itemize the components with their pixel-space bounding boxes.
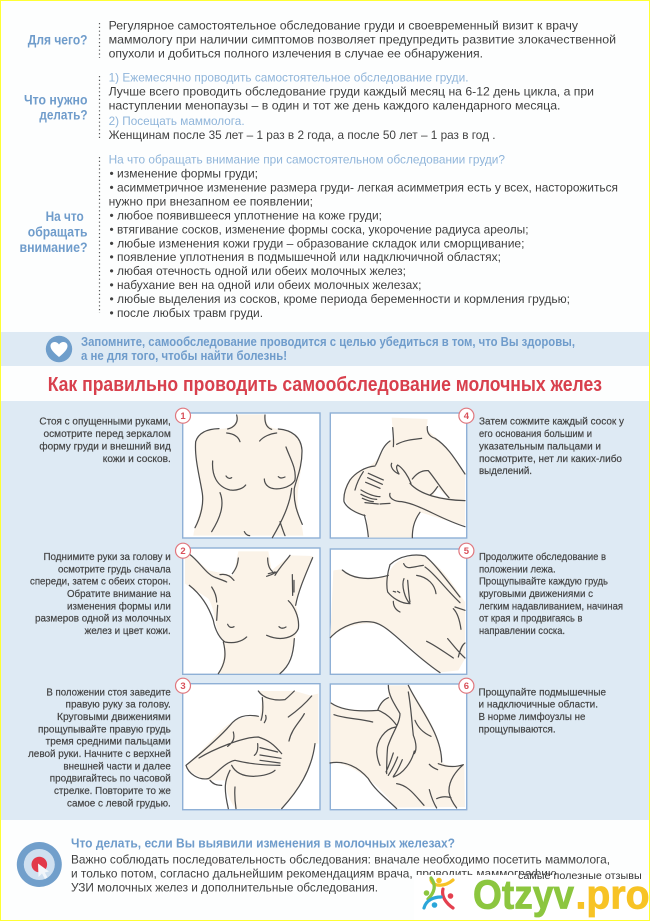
step 3 text: правую руку за голову. xyxy=(66,699,171,711)
text block: why: опухоли и добиться полного излечения в случае ее обнаружения. xyxy=(109,46,483,60)
step 2 text xyxy=(30,551,172,637)
panel: step 3 illustration xyxy=(176,678,320,810)
step 3 text: продвигайтесь по часовой xyxy=(50,773,171,785)
text block: symptom list: • любые выделения из сосков, кроме периода беременности и кормления грудью; xyxy=(110,292,570,306)
text block: symptom list: • после любых травм груди. xyxy=(110,306,263,320)
step 2 text: изменения формы или xyxy=(67,600,171,612)
watermark tagline: самые полезные отзывы xyxy=(518,870,642,882)
heading: what to do: делать? xyxy=(39,106,88,122)
step 4 text xyxy=(479,416,625,477)
step 3 text: тремя средними пальцами xyxy=(46,736,171,748)
callout: remember: а не для того, чтобы найти болезнь! xyxy=(81,349,287,363)
step 2 text: осмотрите грудь сначала xyxy=(58,563,171,575)
section: why xyxy=(28,18,616,60)
text block: what to do xyxy=(109,71,594,142)
step 1 text: кожи и сосков. xyxy=(103,453,171,465)
step 3 text xyxy=(28,686,171,809)
text block: symptom list: • асимметричное изменение размера груди- легкая асимметрия есть у всех, насторожиться xyxy=(110,181,618,195)
step 1 text: форму груди и внешний вид xyxy=(39,440,171,452)
text block: why xyxy=(109,18,616,60)
step 5 text: круговыми движениями с xyxy=(479,588,593,600)
step 6 text: Прощупайте подмышечные xyxy=(478,686,606,698)
step 5 text: от края и продвигаясь в xyxy=(479,613,583,625)
text block: what to do if changes found: и только потом, согласно дальнейшим рекомендациям врача, проводить маммографию, xyxy=(71,867,560,881)
panel: step 4 illustration: 4 xyxy=(464,411,470,422)
step 3 text: Круговыми движениями xyxy=(57,711,171,723)
step 5 text: направлении соска. xyxy=(479,625,565,637)
step 1 text: Стоя с опущенными руками, xyxy=(39,416,171,428)
callout: remember: Запомните, самообследование проводится с целью убедиться в том, что Вы здоровы, xyxy=(81,335,575,349)
panel: step 6 illustration: 6 xyxy=(464,681,469,692)
step 5 text: Продолжите обследование в xyxy=(479,551,606,563)
text block: symptom list: • втягивание сосков, изменение формы соска, укорочение радиуса ареолы; xyxy=(110,222,528,236)
step 4 text: указательным пальцами и xyxy=(479,440,601,452)
panel: step 3 illustration: 3 xyxy=(180,681,186,692)
step 3 text: внешней части и далее xyxy=(63,760,171,772)
step 2 text: размеров одной из молочных xyxy=(35,613,172,625)
step 2 text: Поднимите руки за голову и xyxy=(44,551,171,563)
text block: why: маммологу при наличии симптомов позволяет предупредить развитие злокачественной xyxy=(109,32,616,46)
section: what to do xyxy=(24,71,594,142)
panel: step 1 illustration: 1 xyxy=(180,411,186,422)
panel: step 6 illustration xyxy=(330,678,474,810)
heading: why: Для чего? xyxy=(28,32,88,48)
icon: watermark people xyxy=(424,878,453,908)
step 4 text: выделений. xyxy=(479,465,532,477)
heading: what to watch: обращать xyxy=(28,224,88,240)
step 5 text: легким надавливанием, начиная xyxy=(479,600,623,612)
step 2 text: Обратите внимание на xyxy=(67,588,171,600)
panel: step 5 illustration: 5 xyxy=(464,546,470,557)
panel: step 5 illustration xyxy=(330,543,474,674)
step 1 text xyxy=(39,416,171,465)
panel: step 2 illustration xyxy=(176,543,320,674)
text block: what to do if changes found: УЗИ молочных желез и дополнительные обследования. xyxy=(71,881,378,895)
step 1 text: осмотрите перед зеркалом xyxy=(44,428,171,440)
text block: symptom list: • любое появившееся уплотнение на коже груди; xyxy=(110,208,382,222)
panel: step 4 illustration xyxy=(330,408,474,538)
icon: target with cursor xyxy=(17,842,62,887)
step 5 text: положении лежа. xyxy=(479,563,556,575)
panel: step 2 illustration: 2 xyxy=(180,546,186,557)
step 4 text: Затем сожмите каждый сосок у xyxy=(479,416,625,428)
text block: symptom list: • любая отечность одной или обеих молочных желез; xyxy=(110,264,406,278)
heading: what to watch: внимание? xyxy=(20,239,88,255)
text block: symptom list: • изменение формы груди; xyxy=(110,167,258,181)
text block: symptom list: На что обращать внимание при самостоятельном обследовании груди? xyxy=(109,153,505,167)
step 2 text: спереди, затем с обеих сторон. xyxy=(30,576,171,588)
text block: why: Регулярное самостоятельное обследование груди и своевременный визит к врачу xyxy=(109,18,578,32)
step 3 text: прощупывайте правую грудь xyxy=(38,723,171,735)
text block: what to do: 2) Посещать маммолога. xyxy=(109,114,245,128)
step 4 text: посмотрите, нет ли каких-либо xyxy=(479,453,622,465)
step 3 text: стрелке. Повторите то же xyxy=(54,785,171,797)
watermark: Otzyv.pro xyxy=(414,870,650,921)
text block: what to do: Женщинам после 35 лет – 1 раз в 2 года, а после 50 лет – 1 раз в год . xyxy=(109,128,495,142)
heading: what to do: Что нужно xyxy=(24,92,88,108)
step 3 text: самое с левой грудью. xyxy=(67,797,171,809)
text block: what to do: наступлении менопаузы – в один и тот же день каждого календарного месяца. xyxy=(109,99,560,113)
heading: what to watch xyxy=(20,208,88,255)
step 6 text: прощупываются. xyxy=(478,723,556,735)
heading: what to do xyxy=(24,92,88,122)
panel: step 1 illustration xyxy=(176,408,320,538)
heading: what to watch: На что xyxy=(46,208,84,224)
text block: symptom list: • появление уплотнения в подмышечной или надключичной областях; xyxy=(110,250,501,264)
step 2 text: желез и цвет кожи. xyxy=(85,625,171,637)
step 5 text: Прощупывайте каждую грудь xyxy=(479,576,608,588)
step 6 text: и надключичные области. xyxy=(478,699,598,711)
watermark logo text: Otzyv xyxy=(473,871,574,917)
text block: symptom list: нужно при внезапном ее появлении; xyxy=(109,195,313,209)
text block: symptom list: • набухание вен на одной или обеих молочных железах; xyxy=(110,278,422,292)
step 3 text: В положении стоя заведите xyxy=(46,686,171,698)
icon: heart badge xyxy=(46,336,72,362)
step 6 text xyxy=(478,686,606,735)
text block: what to do if changes found xyxy=(71,837,610,895)
section: what to watch xyxy=(20,153,618,320)
text block: what to do if changes found: Важно соблюдать последовательность обследования: вначале необходимо посетить маммолога, xyxy=(71,853,610,867)
step 3 text: левой руки. Начните с верхней xyxy=(28,748,171,760)
step 4 text: его основания большим и xyxy=(479,428,592,440)
text block: symptom list: • любые изменения кожи груди – образование складок или сморщивание; xyxy=(110,236,524,250)
text block: symptom list xyxy=(109,153,618,320)
text block: what to do: Лучше всего проводить обследование груди каждый месяц на 6-12 день цикла, а при xyxy=(109,85,594,99)
text block: what to do if changes found: Что делать, если Вы выявили изменения в молочных железах? xyxy=(71,837,455,851)
text block: what to do: 1) Ежемесячно проводить самостоятельное обследование груди. xyxy=(109,71,468,85)
callout: remember xyxy=(81,335,575,363)
step 6 text: В норме лимфоузлы не xyxy=(478,711,586,723)
step 5 text xyxy=(479,551,623,637)
